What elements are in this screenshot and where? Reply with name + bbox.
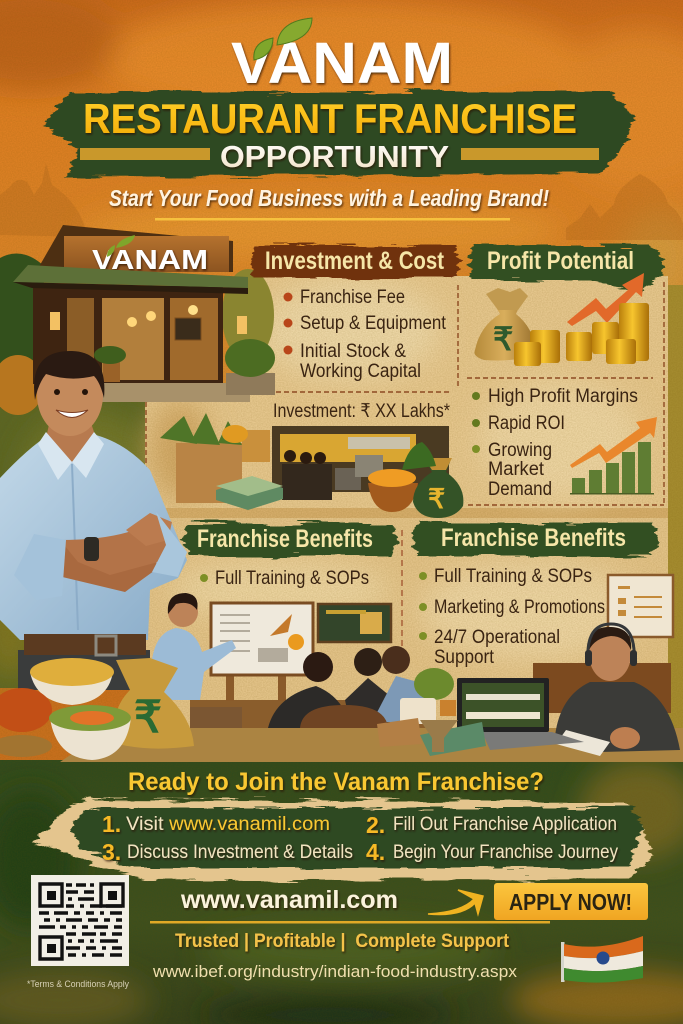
logo: Vanam	[231, 18, 453, 96]
shirt body	[0, 434, 187, 640]
planter	[226, 373, 275, 395]
store wall	[33, 286, 223, 384]
whiteboard	[211, 603, 313, 675]
tagline: Start Your Food Business with a Leading Brand!	[109, 185, 549, 211]
button: apply now	[494, 883, 648, 920]
watch	[84, 537, 99, 561]
tagline underline	[155, 218, 510, 220]
step numbers: 1.	[102, 811, 121, 837]
panel: investment and cost	[251, 245, 460, 422]
rolled sleeve right	[152, 512, 187, 577]
list: profit bullets: Rapid ROI	[488, 413, 565, 434]
bowl rice	[30, 672, 113, 705]
list: cost bullets: Franchise Fee	[300, 287, 405, 308]
illustration: desk counter	[60, 728, 683, 762]
illustration: mug books plant	[377, 668, 486, 756]
list: cost bullets: Setup & Equipment	[300, 313, 447, 334]
illustration: kitchen and groceries: ₹	[428, 484, 445, 514]
list: profit bullets: Market	[488, 459, 545, 480]
divider dashes	[146, 282, 664, 505]
header: benefits right: Franchise Benefits	[441, 524, 626, 552]
sign leaves	[107, 235, 135, 257]
list: profit bullets: High Profit Margins	[488, 386, 638, 407]
source url: www.ibef.org/industry/indian-food-industry.aspx	[152, 962, 518, 981]
agent hair	[589, 627, 631, 650]
trainer	[152, 593, 236, 700]
icon: money sack: ₹	[493, 321, 513, 357]
sign board	[64, 236, 229, 272]
list: profit bullets: Demand	[488, 479, 552, 500]
investment amount: Investment: ₹ XX Lakhs*	[273, 401, 451, 422]
shirt placket	[72, 464, 78, 630]
pavement	[100, 383, 250, 402]
background: right edge olive	[668, 285, 683, 760]
sign text: VANAM	[92, 244, 208, 275]
illustration: food bowls and sack	[0, 658, 194, 760]
step texts	[126, 814, 618, 863]
panel: parchment upper	[145, 276, 668, 508]
list: cost bullets: Initial Stock &	[300, 341, 406, 362]
parchment frame	[33, 800, 653, 881]
leaves over bag	[402, 442, 436, 470]
list: benefits: Support	[434, 647, 495, 668]
illustration: training scene	[152, 593, 430, 742]
smile	[56, 410, 88, 418]
small screen	[318, 604, 391, 642]
panel: profit potential	[469, 245, 664, 500]
step numbers: 2.	[366, 812, 385, 838]
bowl of produce	[368, 483, 418, 512]
gold divider	[150, 921, 550, 924]
step texts: Discuss Investment & Details	[127, 842, 353, 863]
plate fried	[0, 688, 52, 732]
illustration: storefront	[0, 225, 275, 415]
vertical dash divider	[401, 530, 403, 660]
hand	[126, 513, 172, 546]
easel legs	[226, 675, 286, 701]
headset	[588, 624, 634, 660]
icon: money sack	[474, 288, 534, 360]
header: profit potential: Profit Potential	[487, 247, 634, 275]
awning	[13, 265, 248, 288]
list: cost bullets: Working Capital	[300, 361, 421, 382]
background: mottled glow	[0, 0, 683, 310]
cabinet	[533, 663, 671, 713]
chalkboard	[175, 318, 201, 340]
panel: steps	[33, 800, 653, 881]
list: profit bullets: Growing	[488, 440, 552, 461]
lamps	[127, 317, 137, 327]
step texts: Begin Your Franchise Journey	[393, 842, 618, 863]
background: orange textured top	[0, 0, 683, 520]
lit windows	[67, 298, 94, 380]
illustration: kitchen and groceries	[160, 413, 463, 518]
belt	[24, 634, 146, 655]
chart: growth bars	[570, 417, 657, 494]
lower forearm	[54, 545, 158, 592]
rolled sleeve left	[14, 534, 66, 600]
step texts: Visit www.vanamil.com	[126, 814, 330, 835]
step numbers: 4.	[366, 839, 385, 865]
panel: parchment backing band	[145, 500, 668, 530]
agent body	[555, 682, 680, 752]
money stacks	[216, 478, 283, 510]
list: cost bullets	[284, 287, 447, 382]
snacks	[0, 735, 52, 757]
illustration: food bowls and sack: ₹	[134, 693, 162, 742]
heading: ready to join: Ready to Join the Vanam Franchise?	[128, 768, 544, 796]
chairs	[300, 705, 388, 728]
gold bar left	[80, 148, 210, 160]
header: benefits left: Franchise Benefits	[197, 525, 373, 553]
gold bar right	[461, 148, 599, 160]
background: temple silhouettes	[0, 163, 683, 240]
icon: leaves	[254, 18, 312, 60]
hair	[34, 351, 104, 400]
parchment tone patches	[150, 280, 640, 660]
footer mottling	[0, 760, 683, 1024]
button: apply now: APPLY NOW!	[509, 889, 632, 915]
website url: www.vanamil.com	[180, 886, 398, 914]
small planter	[103, 362, 120, 382]
terms note: *Terms & Conditions Apply	[27, 979, 129, 989]
list: benefits: Marketing & Promotions	[434, 597, 605, 618]
list: profit bullets	[472, 386, 638, 500]
illustration: laptop	[457, 678, 584, 750]
green money bag	[413, 462, 463, 518]
logo wordmark: VANAM	[231, 31, 453, 96]
header: investment and cost: Investment & Cost	[265, 247, 445, 275]
papers	[556, 730, 610, 756]
eyes	[54, 389, 60, 395]
foliage right	[222, 269, 274, 361]
icon: growth arrow	[570, 417, 657, 468]
neck	[46, 420, 96, 462]
list: benefits: Full Training & SOPs	[434, 566, 592, 587]
collar	[38, 432, 104, 480]
trousers	[18, 650, 150, 690]
icon: coin stacks	[514, 303, 649, 366]
heading: restaurant franchise: RESTAURANT FRANCHISE	[83, 95, 577, 142]
grocery bag	[176, 443, 242, 503]
panel: parchment lower	[130, 518, 668, 762]
bowl salad	[50, 718, 131, 760]
illustration: support agent	[533, 624, 680, 756]
qr code	[31, 875, 129, 966]
box	[190, 707, 242, 742]
list: benefits	[419, 566, 605, 668]
icon: profit arrow	[567, 273, 644, 326]
trust line: Trusted | Profitable | Complete Support	[175, 931, 510, 952]
store roof	[36, 225, 233, 272]
background: grass left	[0, 398, 160, 688]
step numbers	[102, 811, 385, 865]
panel: franchise benefits left	[182, 523, 398, 589]
icon: curved arrow	[428, 890, 483, 915]
agent head	[589, 627, 631, 681]
list: benefits: 24/7 Operational	[434, 627, 560, 648]
head	[37, 354, 103, 436]
green brush	[70, 808, 644, 868]
banner: title brush	[44, 92, 636, 177]
step texts: Fill Out Franchise Application	[393, 814, 617, 835]
audience	[268, 646, 430, 728]
green footer background	[0, 760, 683, 1024]
panel: franchise benefits right	[412, 523, 660, 668]
agent hand	[610, 727, 640, 749]
icon: india flag	[561, 936, 643, 983]
illustration: smiling franchise owner	[0, 351, 187, 690]
foliage left	[0, 254, 44, 406]
kitchen	[272, 426, 449, 492]
heading: opportunity: OPPORTUNITY	[220, 139, 449, 174]
step numbers: 3.	[102, 839, 121, 865]
illustration: poster	[608, 575, 673, 637]
header: profit potential	[469, 245, 664, 292]
desk	[190, 700, 430, 728]
food sack	[115, 658, 194, 749]
upper forearm	[60, 528, 170, 575]
bullet: training: Full Training & SOPs	[215, 568, 369, 589]
